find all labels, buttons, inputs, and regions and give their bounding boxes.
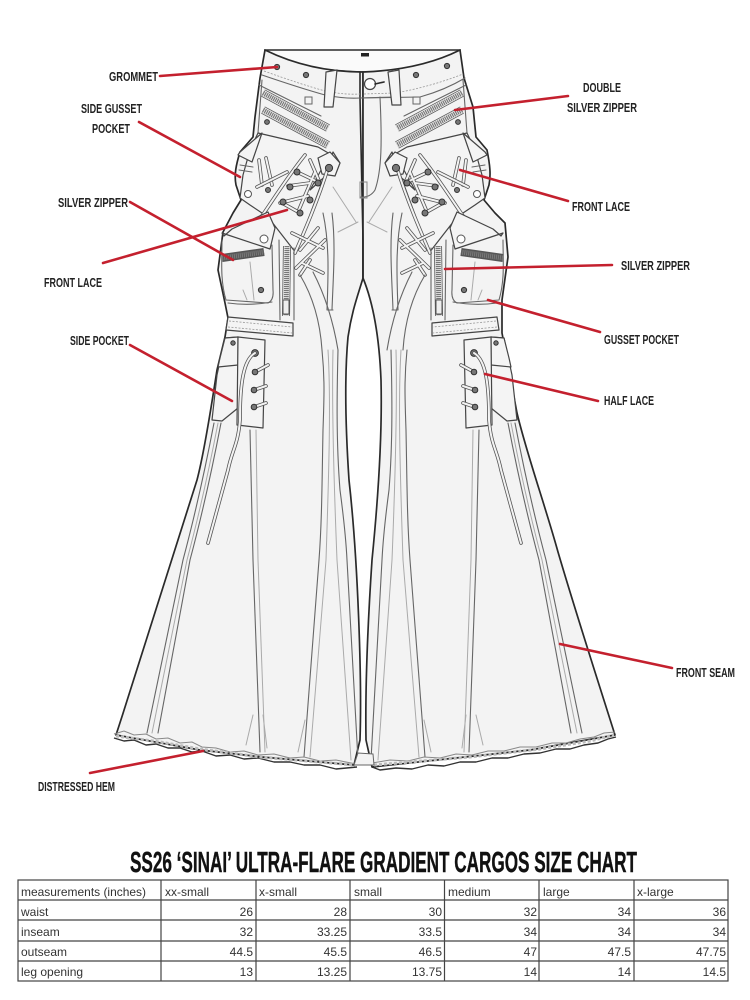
callout: side gusset pocket: SIDE GUSSET [81, 102, 142, 116]
front lace panel [240, 133, 340, 253]
row: leg opening: leg opening [21, 965, 83, 979]
callout: double silver zipper: DOUBLE [583, 81, 621, 95]
row: leg opening [21, 965, 726, 979]
front lace cords [257, 155, 333, 253]
callout: front seam [560, 644, 735, 680]
callout: side gusset pocket: POCKET [92, 122, 130, 136]
header row [21, 885, 674, 899]
row: outseam [21, 945, 726, 959]
row: inseam: inseam [21, 925, 60, 939]
row: leg opening: 14 [524, 965, 537, 979]
callout: front lace left [44, 210, 287, 290]
row: waist: waist [20, 905, 49, 919]
row: outseam: 44.5 [230, 945, 253, 959]
callout: gusset pocket [488, 300, 679, 347]
row: outseam: 47.75 [696, 945, 726, 959]
header row: small [354, 885, 382, 899]
callout: silver zipper right: SILVER ZIPPER [621, 259, 690, 273]
callout: silver zipper left: SILVER ZIPPER [58, 196, 128, 210]
right upper detail [367, 80, 503, 350]
waistband back interior [265, 50, 460, 72]
technical drawing: ultra-flare cargo pants [114, 50, 616, 770]
cargo pocket [222, 212, 275, 249]
callout: side pocket: SIDE POCKET [70, 334, 129, 348]
callout: half lace: HALF LACE [604, 394, 654, 408]
callout: front lace left: FRONT LACE [44, 276, 102, 290]
callout: double silver zipper [455, 81, 637, 115]
header row: measurements (inches) [21, 885, 146, 899]
row: waist: 32 [524, 905, 537, 919]
callout: grommet: GROMMET [109, 70, 158, 84]
size chart table [18, 880, 728, 981]
callout: half lace [485, 374, 654, 408]
side gusset flap [238, 133, 262, 162]
belt loops [324, 70, 401, 107]
row: inseam: 34 [524, 925, 537, 939]
right leg silhouette [363, 50, 615, 767]
distressed hem left [114, 731, 357, 769]
row: leg opening: 13.75 [412, 965, 442, 979]
callout: front lace right: FRONT LACE [572, 200, 630, 214]
double zippers [258, 80, 328, 145]
callout: double silver zipper: SILVER ZIPPER [567, 101, 637, 115]
row: outseam: 46.5 [419, 945, 442, 959]
header row: xx-small [165, 885, 209, 899]
header row: large [543, 885, 570, 899]
header row: medium [448, 885, 491, 899]
left leg silhouette [116, 50, 363, 765]
front center seam [250, 430, 260, 752]
header row: x-large [637, 885, 674, 899]
outer side stripe [147, 423, 214, 733]
callout: side pocket [70, 334, 232, 401]
callout: silver zipper left [58, 196, 233, 260]
vertical zipper [286, 246, 287, 316]
row: waist: 28 [334, 905, 347, 919]
callout: gusset pocket: GUSSET POCKET [604, 333, 679, 347]
callout: grommet [109, 67, 277, 84]
row: leg opening: 13.25 [317, 965, 347, 979]
waist cuff band [226, 317, 293, 336]
callout: side gusset pocket [81, 102, 240, 177]
row: inseam: 33.25 [317, 925, 347, 939]
left lower detail [147, 337, 358, 760]
row: outseam: 47 [524, 945, 537, 959]
row: inseam: 33.5 [419, 925, 442, 939]
hanger tab [361, 53, 369, 56]
inner leg piping [304, 350, 324, 757]
row: leg opening: 14 [618, 965, 631, 979]
row: inseam [21, 925, 726, 939]
left upper detail [222, 80, 358, 350]
half lace panel [237, 337, 265, 428]
row: waist: 34 [618, 905, 631, 919]
row: inseam: 32 [240, 925, 253, 939]
row: waist: 30 [429, 905, 442, 919]
row: waist: 36 [713, 905, 726, 919]
inner thigh piping [323, 213, 334, 310]
crossing straps [292, 228, 325, 275]
row: outseam: 45.5 [324, 945, 347, 959]
callout: distressed hem [38, 751, 203, 794]
row: inseam: 34 [618, 925, 631, 939]
row: waist: 26 [240, 905, 253, 919]
long lace cord [208, 353, 255, 543]
right lower detail [371, 337, 582, 760]
center front seam [360, 72, 363, 278]
waistband front [262, 63, 465, 98]
header row: x-small [259, 885, 297, 899]
callout: front lace right [460, 170, 630, 214]
row: outseam: 47.5 [608, 945, 631, 959]
distressed hem right [354, 732, 616, 770]
side pocket gusset [212, 337, 238, 421]
row: leg opening: 14.5 [703, 965, 726, 979]
row: outseam: outseam [21, 945, 67, 959]
row: inseam: 34 [713, 925, 726, 939]
callout: silver zipper right [445, 259, 690, 273]
table grid [18, 880, 728, 981]
row: waist [20, 905, 726, 919]
callout: distressed hem: DISTRESSED HEM [38, 780, 115, 794]
waist button and fly [360, 78, 384, 198]
row: leg opening: 13 [240, 965, 253, 979]
